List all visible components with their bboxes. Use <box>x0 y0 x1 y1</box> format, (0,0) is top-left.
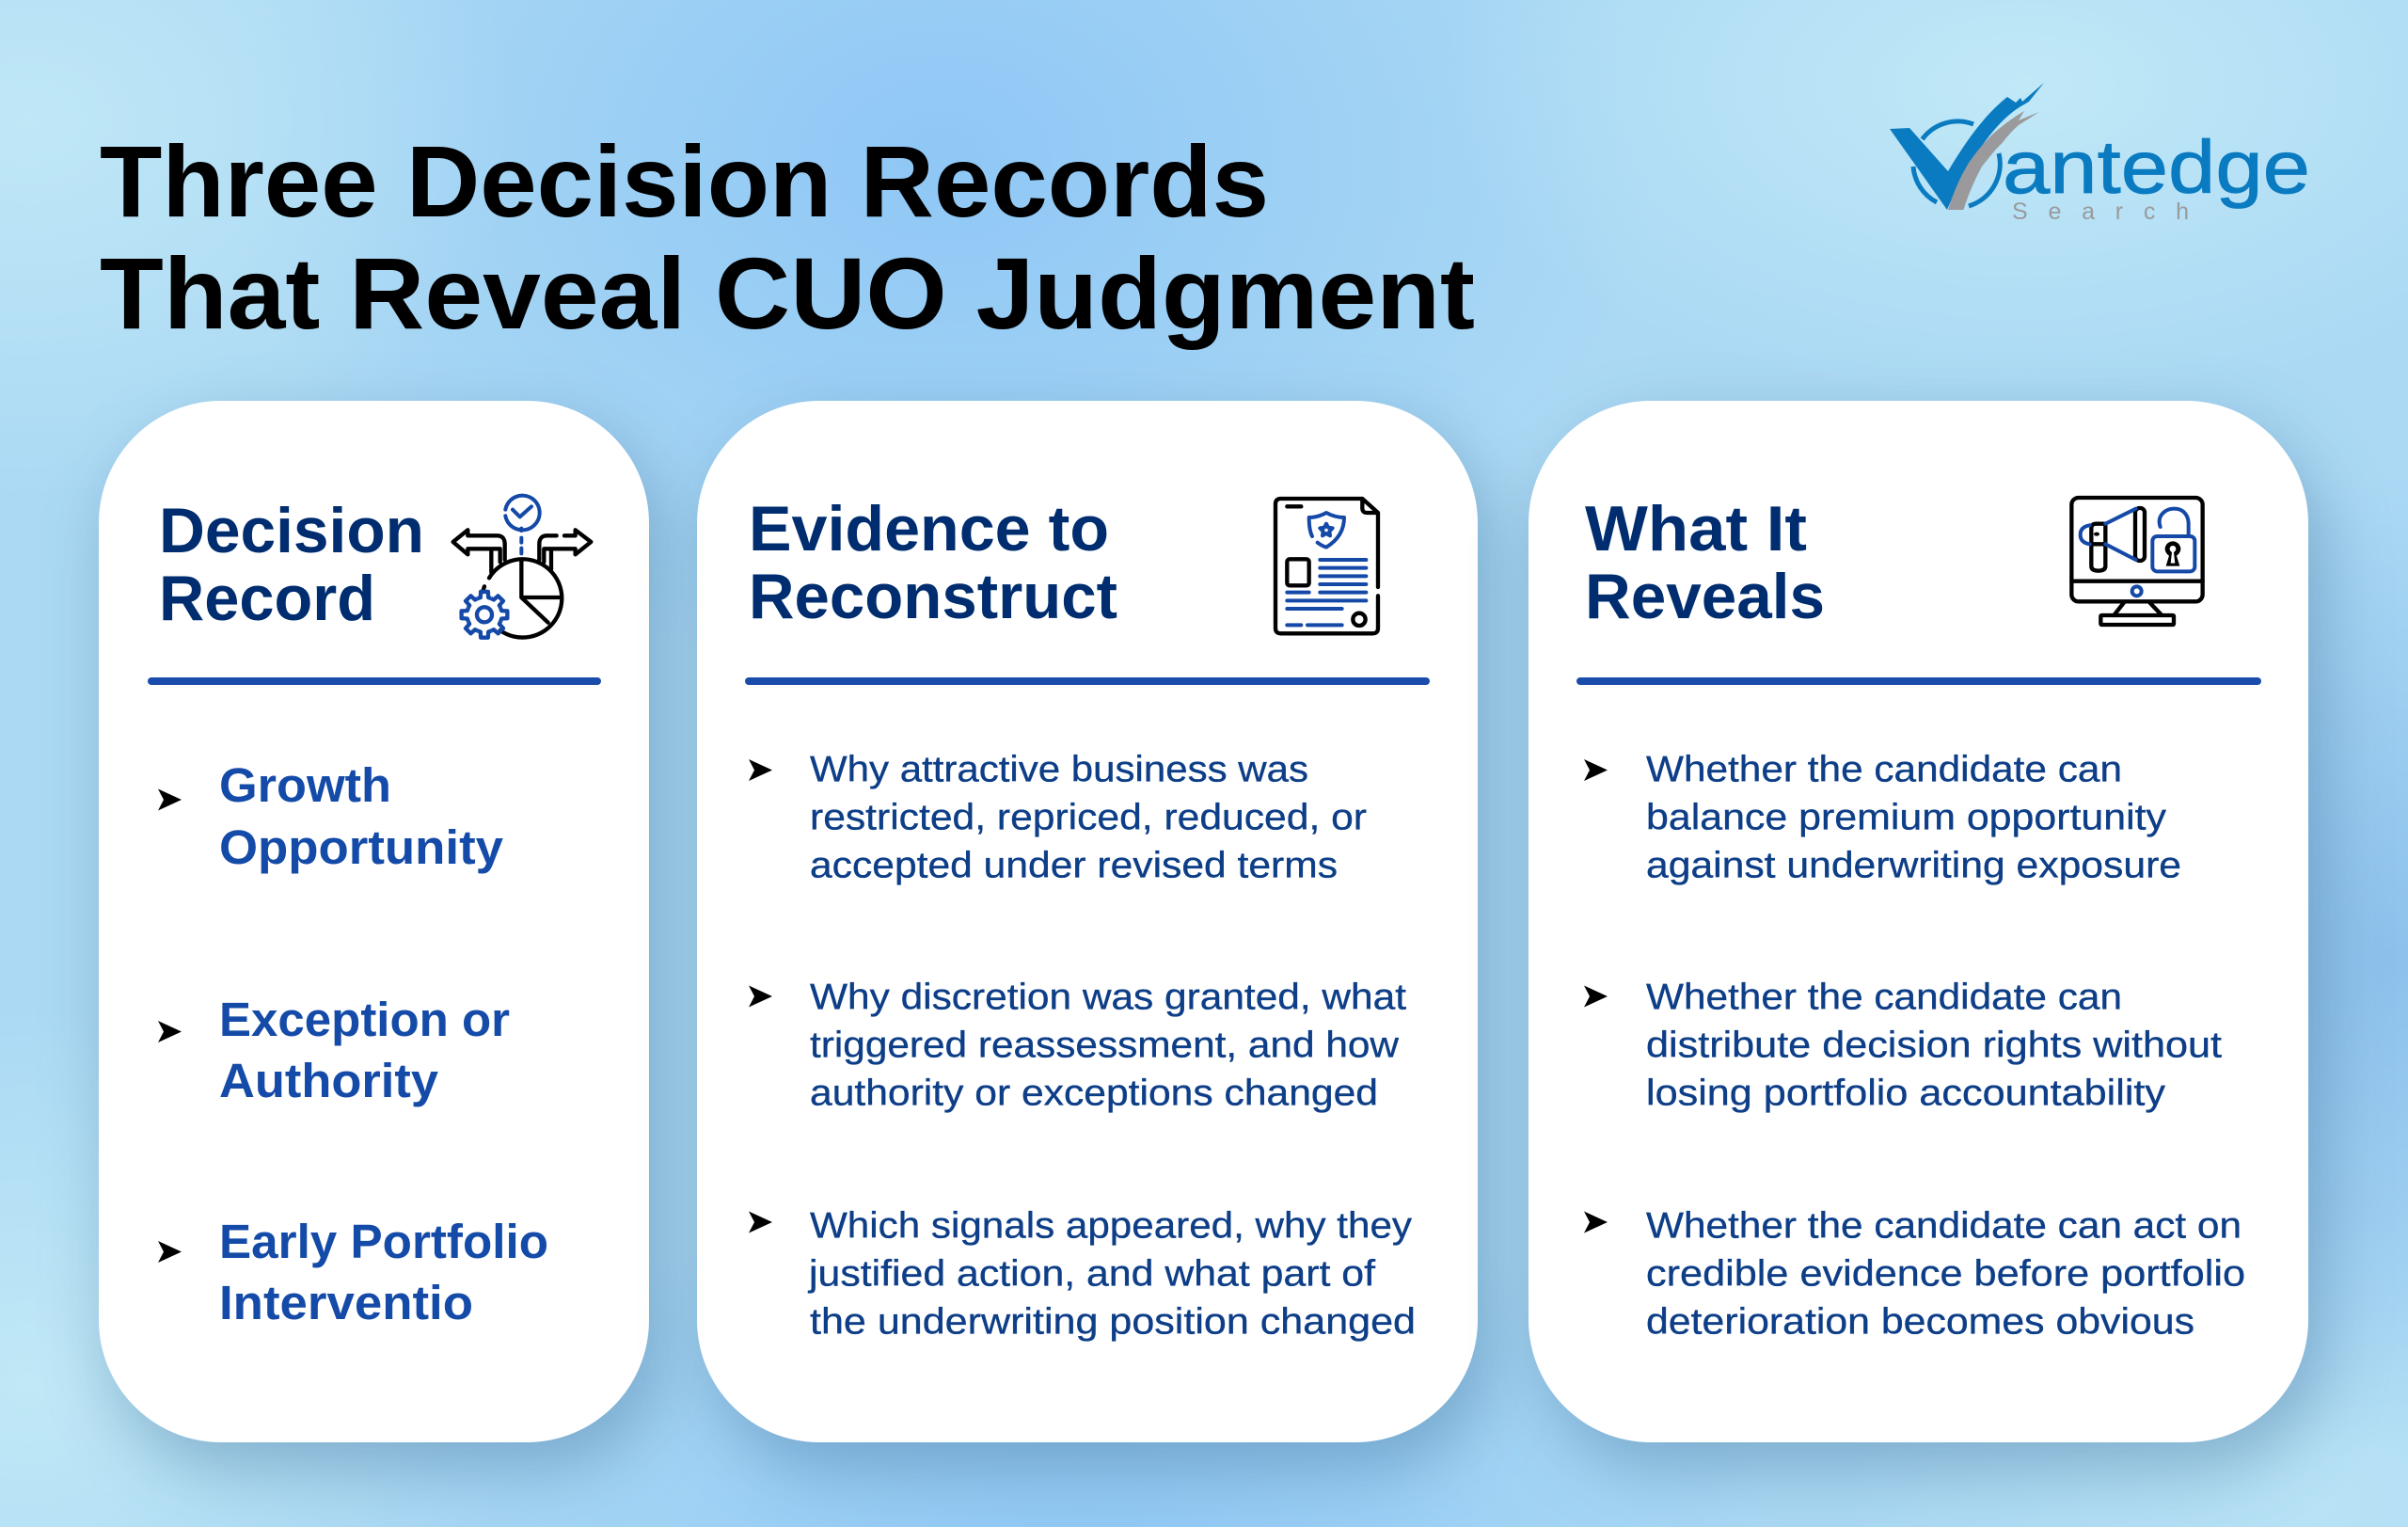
heading: Decision Record <box>159 495 424 634</box>
logo: Vantedge Search: antedge <box>2003 125 2310 209</box>
item: Exception or Authority <box>158 993 510 1107</box>
heading: What It Reveals: What It <box>1585 493 1807 565</box>
icon: decision paths with pie chart and gear <box>453 496 591 638</box>
panel: Evidence to Reconstruct <box>697 401 1478 1442</box>
heading: Evidence to Reconstruct <box>749 493 1117 632</box>
item: discretion: authority or exceptions changed <box>810 1074 1378 1114</box>
icon: monitor with megaphone and open lock <box>2071 498 2203 625</box>
item: credible evidence <box>1584 1206 2245 1343</box>
item: premium balance: against underwriting exposure <box>1646 846 2181 886</box>
item: signals: justified action, and what part of <box>808 1254 1375 1295</box>
item: signals: the underwriting position changed <box>810 1302 1416 1343</box>
heading: Decision Record: Decision <box>159 495 424 566</box>
item: attractive business: restricted, repriced, reduced, or <box>810 798 1367 838</box>
heading: Evidence to Reconstruct: Reconstruct <box>749 561 1117 632</box>
item: Early Portfolio Interventio: Early Portfolio <box>219 1215 548 1268</box>
title: Three Decision Records <box>100 124 1269 238</box>
item: decision rights: losing portfolio accountability <box>1646 1074 2166 1114</box>
heading: Evidence to Reconstruct: Evidence to <box>749 493 1109 565</box>
heading: What It Reveals: Reveals <box>1585 561 1825 632</box>
logo: Vantedge Search <box>1890 83 2310 225</box>
item: premium balance <box>1584 750 2181 886</box>
item: discretion <box>749 978 1406 1114</box>
item: premium balance: balance premium opportunity <box>1646 798 2167 838</box>
logo: Vantedge Search: Search <box>2012 199 2189 225</box>
panel: What It Reveals <box>1529 401 2308 1442</box>
item: credible evidence: credible evidence before portfolio <box>1646 1254 2245 1295</box>
item: decision rights <box>1584 978 2222 1114</box>
icon: document with shield <box>1275 499 1378 633</box>
item: premium balance: Whether the candidate can <box>1646 750 2122 790</box>
item: decision rights: distribute decision rights without <box>1646 1026 2222 1066</box>
title: That Reveal CUO Judgment <box>100 236 1475 350</box>
item: attractive business <box>749 750 1367 886</box>
panel: Decision Record <box>99 401 649 1442</box>
heading: Decision Record: Record <box>159 563 375 634</box>
item: Early Portfolio Interventio <box>158 1215 548 1329</box>
item: Growth Opportunity: Opportunity <box>219 820 504 874</box>
item: Growth Opportunity <box>158 758 504 874</box>
item: Growth Opportunity: Growth <box>219 758 391 812</box>
item: Early Portfolio Interventio: Interventio <box>219 1276 473 1329</box>
item: Exception or Authority: Exception or <box>219 993 510 1046</box>
item: Exception or Authority: Authority <box>219 1054 439 1107</box>
item: discretion: Why discretion was granted, what <box>810 978 1406 1018</box>
item: credible evidence: deterioration becomes obvious <box>1646 1302 2194 1343</box>
item: discretion: triggered reassessment, and how <box>810 1026 1400 1066</box>
item: signals: Which signals appeared, why they <box>810 1206 1413 1247</box>
heading: What It Reveals <box>1585 493 1825 632</box>
item: attractive business: Why attractive business was <box>810 750 1308 790</box>
title <box>100 124 1475 350</box>
item: decision rights: Whether the candidate can <box>1646 978 2122 1018</box>
item: credible evidence: Whether the candidate can act on <box>1646 1206 2242 1247</box>
item: signals <box>749 1206 1416 1343</box>
item: attractive business: accepted under revised terms <box>810 846 1338 886</box>
